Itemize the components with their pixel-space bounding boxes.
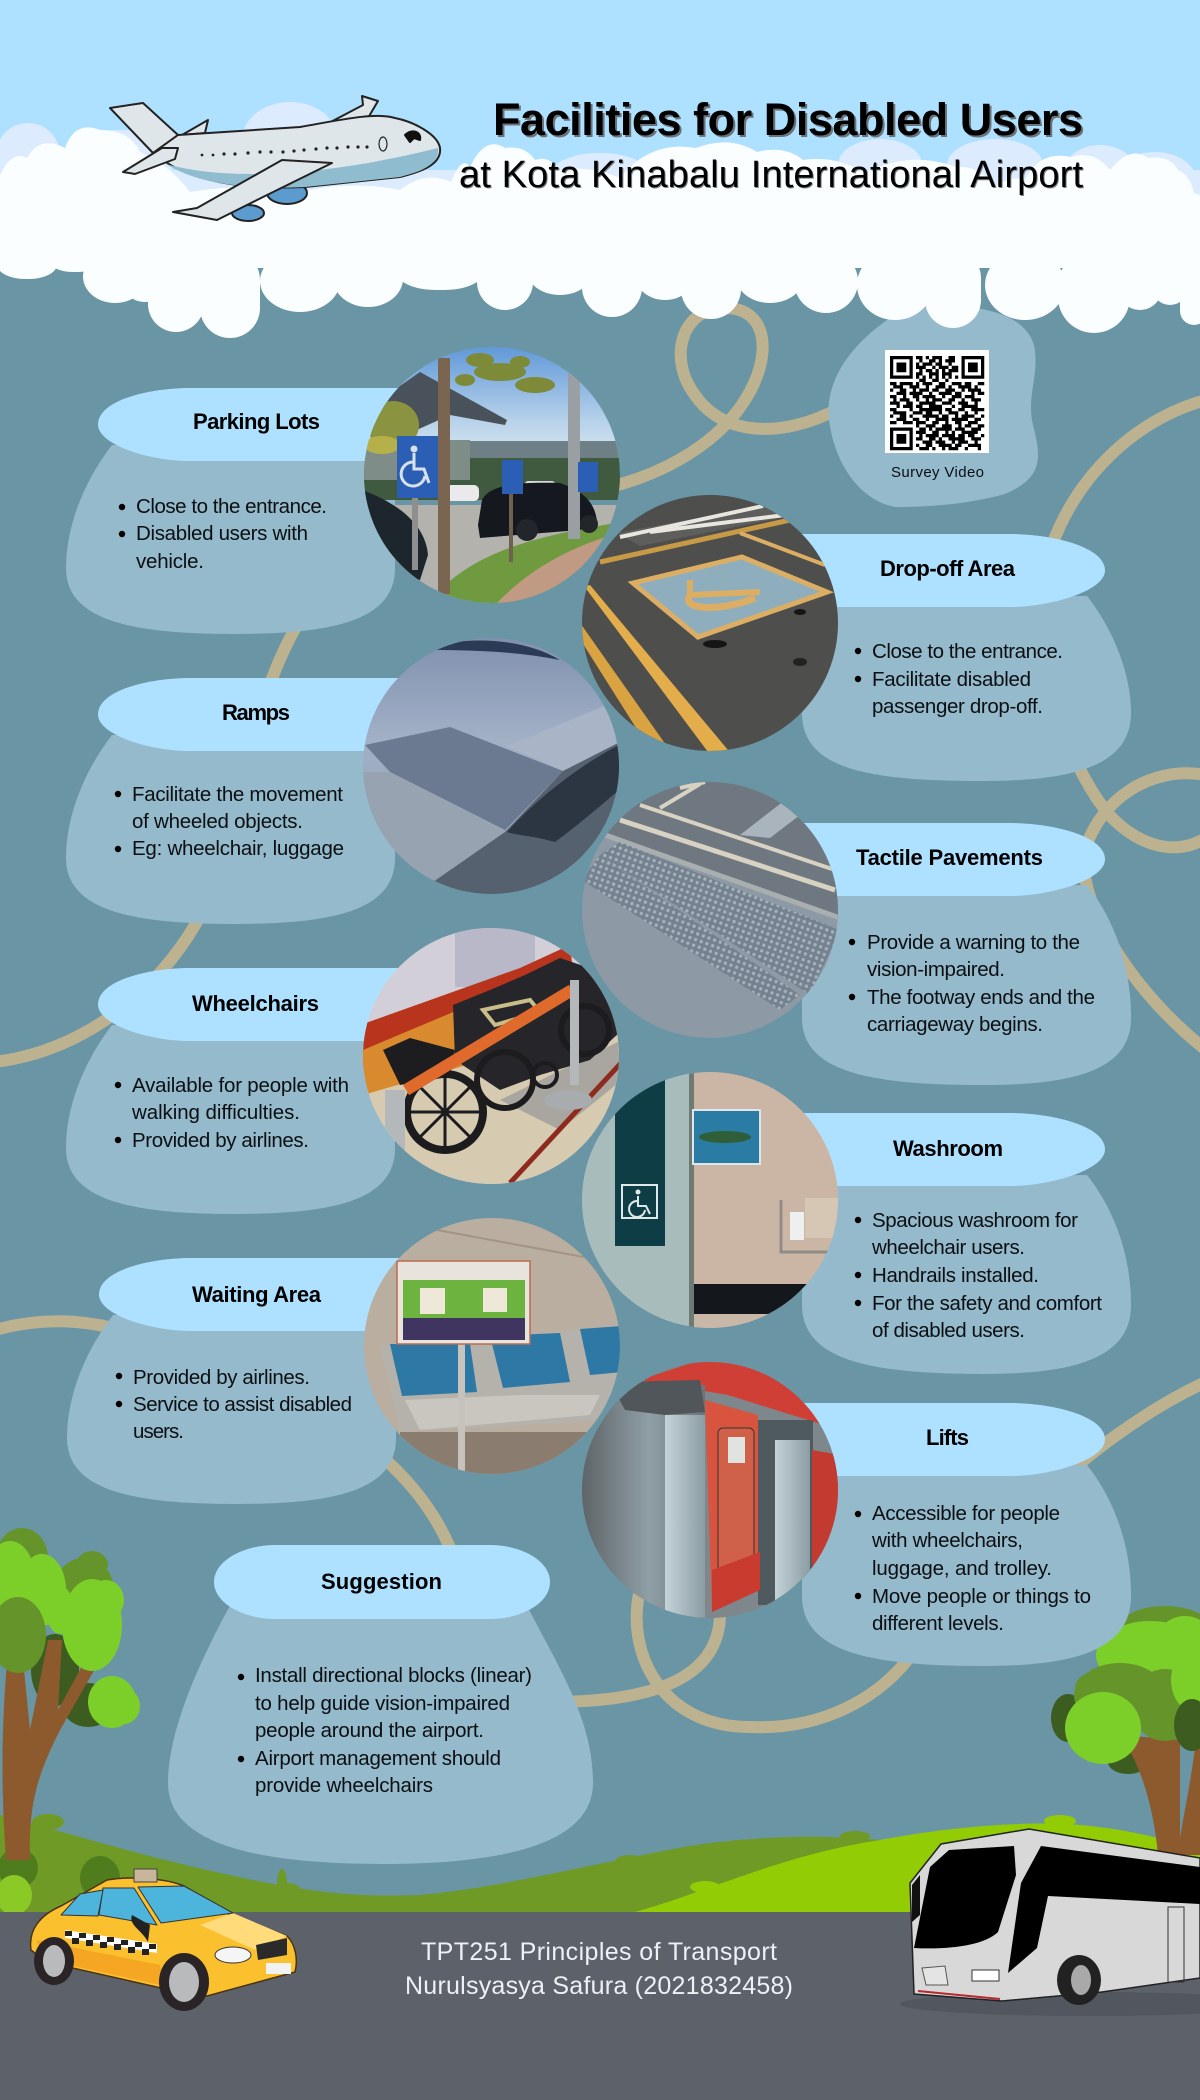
bullet list: walking difficulties. — [131, 1101, 300, 1124]
bullet list: carriageway begins. — [867, 1013, 1043, 1036]
heading: Washroom — [893, 1136, 1003, 1161]
bullet list: wheelchair users. — [871, 1236, 1025, 1259]
photo: wheelchairs — [360, 925, 622, 1190]
bullet list — [116, 1366, 352, 1443]
heading: Lifts — [926, 1425, 969, 1450]
photo: parking lot — [360, 345, 622, 605]
heading: Ramps — [222, 700, 290, 725]
photo: waiting area — [360, 1215, 624, 1482]
panel: wheelchairs — [66, 968, 420, 1214]
bullet list: Close to the entrance. — [136, 495, 327, 518]
photo: drop-off area — [578, 493, 840, 753]
photo: tactile pavements — [580, 780, 842, 1042]
footer text: TPT251 Principles of Transport — [421, 1938, 777, 1966]
QR code — [885, 350, 989, 453]
light clouds — [0, 102, 1200, 212]
panel: suggestion — [168, 1545, 593, 1864]
bullet list: vision-impaired. — [867, 958, 1005, 981]
bullet list — [855, 640, 1063, 718]
subtitle: at Kota Kinabalu International Airport — [459, 154, 1083, 196]
bullet list — [855, 1502, 1091, 1635]
bullet list: Facilitate the movement — [132, 783, 343, 806]
icon: taxi — [31, 1869, 296, 2011]
bullet list — [119, 495, 327, 573]
footer text: Nurulsyasya Safura (2021832458) — [405, 1972, 793, 2000]
bullet list: Provide a warning to the — [867, 931, 1080, 954]
heading: Waiting Area — [192, 1282, 322, 1307]
right tree — [1051, 1606, 1200, 1855]
bullet list: Provided by airlines. — [132, 1129, 309, 1152]
bullet list: Available for people with — [132, 1074, 349, 1097]
bullet list: Facilitate disabled — [872, 668, 1031, 691]
bullet list — [115, 783, 344, 860]
title: Facilities for Disabled Users — [493, 94, 1083, 145]
bullet list: of wheeled objects. — [132, 810, 303, 833]
bullet list: The footway ends and the — [867, 986, 1095, 1009]
bullet list: Close to the entrance. — [872, 640, 1063, 663]
white cloud band — [0, 127, 1200, 338]
bullet list: Accessible for people — [872, 1502, 1060, 1525]
bullet list: Spacious washroom for — [872, 1209, 1078, 1232]
bullet list — [855, 1209, 1102, 1342]
footer text — [405, 1938, 793, 2000]
bullet list: Disabled users with — [136, 522, 308, 545]
hills — [0, 1814, 1200, 1915]
bullet list: different levels. — [872, 1612, 1004, 1635]
photo: lifts — [580, 1360, 842, 1622]
panel: drop-off area — [780, 534, 1131, 781]
panel: waiting area — [67, 1258, 421, 1504]
QR caption: Survey Video — [891, 464, 984, 481]
heading: Wheelchairs — [192, 991, 319, 1016]
bullet list: Install directional blocks (linear) — [255, 1664, 532, 1687]
bullet list — [849, 931, 1095, 1036]
heading: Parking Lots — [193, 409, 320, 434]
heading: Suggestion — [321, 1569, 442, 1594]
bullet list: Handrails installed. — [872, 1264, 1039, 1287]
bullet list: of disabled users. — [872, 1319, 1025, 1342]
panel: parking lots — [66, 388, 420, 634]
bullet list: people around the airport. — [255, 1719, 484, 1742]
heading: Drop-off Area — [880, 556, 1016, 581]
bullet list: Eg: wheelchair, luggage — [132, 837, 344, 860]
bullet list: users. — [133, 1420, 184, 1443]
bullet list: Airport management should — [255, 1747, 501, 1770]
bullet list: passenger drop-off. — [872, 695, 1043, 718]
bullet list: luggage, and trolley. — [872, 1557, 1052, 1580]
photo: washroom — [580, 1070, 844, 1334]
decorative swirl lines — [0, 308, 1200, 1727]
photo: ramps — [360, 635, 622, 897]
panel: ramps — [66, 678, 420, 924]
bullet list: with wheelchairs, — [871, 1529, 1023, 1552]
road — [0, 1912, 1200, 2100]
bullet list: For the safety and comfort — [872, 1292, 1102, 1315]
icon: airplane — [110, 96, 440, 221]
bullet list — [238, 1664, 532, 1797]
bullet list: vehicle. — [136, 550, 204, 573]
bullet list: provide wheelchairs — [255, 1774, 433, 1797]
bullet list: to help guide vision-impaired — [255, 1692, 510, 1715]
panel: washroom — [780, 1113, 1131, 1374]
bullet list — [115, 1074, 349, 1152]
sky — [0, 0, 1200, 262]
panel: lifts — [780, 1403, 1131, 1666]
bullet list: Move people or things to — [872, 1585, 1091, 1608]
panel: survey video QR — [828, 305, 1038, 507]
left tree — [0, 1528, 140, 1860]
icon: bus — [900, 1829, 1200, 2016]
bullet list: Provided by airlines. — [133, 1366, 310, 1389]
bullet list: Service to assist disabled — [133, 1393, 352, 1416]
panel: tactile pavements — [780, 823, 1131, 1085]
heading: Tactile Pavements — [856, 845, 1043, 870]
